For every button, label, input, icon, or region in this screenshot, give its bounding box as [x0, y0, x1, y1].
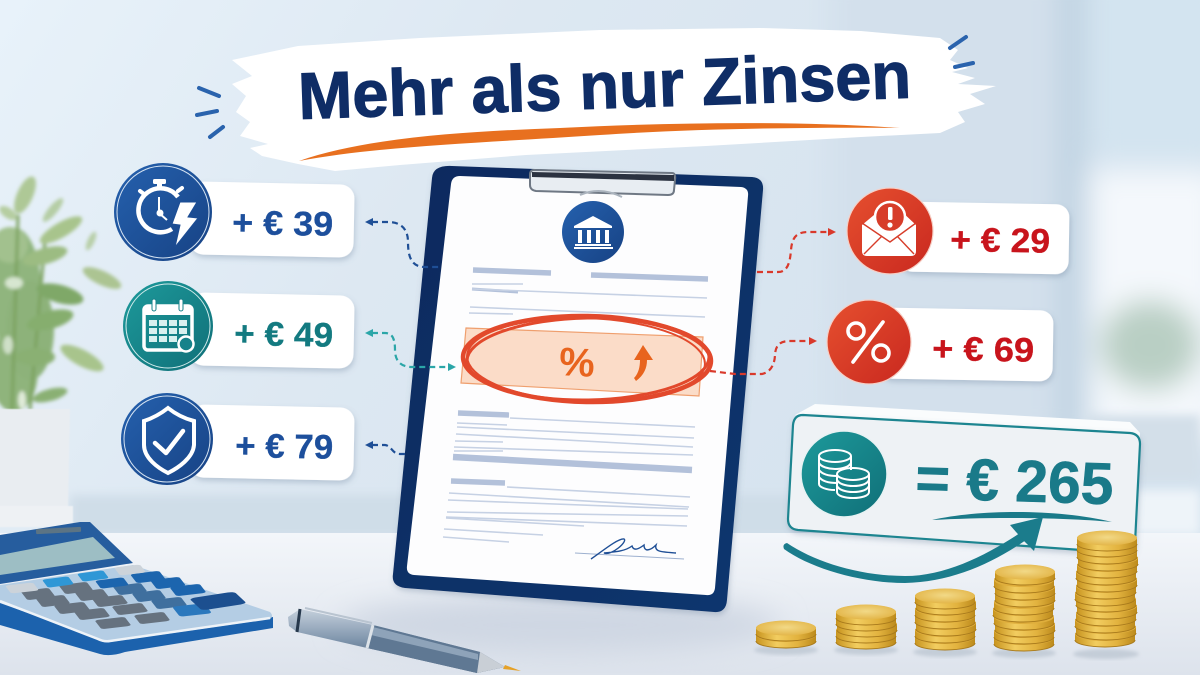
card: +69: [827, 300, 1054, 384]
calculator: [0, 522, 273, 655]
coin stack 4: [992, 564, 1056, 658]
card: +39: [114, 163, 355, 261]
coin stack 3: [913, 588, 977, 657]
contract text lines: [443, 270, 708, 542]
signature: [575, 539, 684, 559]
interest rate highlight: [461, 314, 712, 406]
arrow: clipboard to +29: [757, 228, 836, 272]
clip: [530, 170, 675, 197]
decorative ticks right: [950, 37, 973, 67]
red hand-drawn circle: [462, 314, 712, 406]
plant: [0, 173, 124, 412]
percent symbol: %: [558, 340, 596, 386]
card: +49: [123, 281, 355, 371]
arrow: clipboard to +79: [365, 441, 408, 454]
calculator keys: [5, 564, 247, 629]
rising arrow: [634, 345, 653, 381]
plant pot: [0, 409, 73, 527]
total value: = € 265: [915, 445, 1115, 517]
card: +29: [847, 188, 1070, 274]
coin stack 1: [754, 620, 818, 655]
arrow: clipboard to +69: [710, 337, 817, 374]
icon: stopwatch with lightning: [138, 179, 198, 247]
value: + € 69: [932, 330, 1035, 370]
growth arrow: [783, 517, 1043, 583]
title brush stroke: [232, 28, 996, 171]
decorative ticks left: [197, 88, 223, 137]
value: + € 39: [232, 204, 334, 244]
icon: calendar: [144, 299, 194, 352]
coin stack 5: [1073, 530, 1139, 659]
orange underline stroke: [299, 123, 900, 161]
coin stacks: [754, 530, 1139, 659]
title: Mehr als nur Zinsen: [297, 38, 912, 133]
swoosh under total: [932, 512, 1112, 522]
icon: warning envelope: [862, 202, 916, 256]
value: + € 29: [950, 221, 1051, 261]
icon: percent sign: [848, 322, 889, 362]
icon: shield with check: [144, 408, 194, 473]
coin stack 2: [834, 604, 898, 655]
total card: [788, 404, 1140, 553]
value: + € 49: [234, 315, 334, 355]
arrow: clipboard to +49: [365, 329, 456, 371]
paper sheet: [407, 176, 748, 595]
bank logo: [562, 201, 624, 263]
pen: [288, 608, 521, 673]
arrow: clipboard to +39: [365, 218, 441, 267]
icon: coin stacks: [819, 450, 869, 498]
clipboard: [393, 166, 763, 612]
value: + € 79: [235, 427, 334, 467]
card: +79: [121, 393, 355, 485]
